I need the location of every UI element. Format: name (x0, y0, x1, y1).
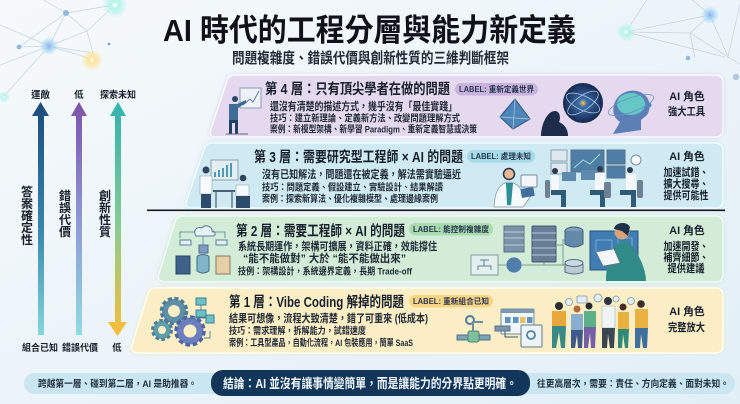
layer 3 description (262, 167, 461, 204)
axis: answer certainty: 組合已知 (22, 342, 58, 353)
icon: brain head (606, 90, 656, 134)
axis: answer certainty (21, 89, 58, 353)
AI role: 擴大搜尋、 (664, 176, 708, 190)
AI role: 提供可能性 (664, 188, 709, 202)
axis: error cost: 錯 (59, 188, 71, 203)
layer 1 heading: 第 1 層：Vibe Coding 解掉的問題 (229, 293, 404, 311)
axis: innovation nature: 低 (112, 342, 122, 353)
icon: team of people (552, 294, 648, 348)
axis: answer certainty: 答 (21, 184, 33, 199)
layer 1 description: 案例：工具型產品，自動化流程，AI 包裝應用，簡單 SaaS (229, 337, 413, 348)
label pill: LABEL: 處理未知 (471, 151, 531, 161)
icon: geometry pyramid (500, 99, 530, 129)
AI role (664, 223, 708, 275)
label pill (409, 295, 493, 308)
axis: answer certainty: 定 (21, 220, 33, 235)
axis: innovation nature: 創 (99, 188, 111, 203)
icon: researcher with tablet (494, 168, 537, 207)
AI role: 完整放大 (668, 320, 705, 334)
layer 4 description: 案例：新模型架構、新學習 Paradigm、重新定義智慧或決策 (270, 124, 478, 134)
layer 4 description (270, 99, 478, 134)
panel: layer 4 (210, 75, 723, 137)
layer 2 description: 技例：架構設計，系統邊界定義，長期 Trade-off (238, 266, 413, 276)
axis: innovation nature: 性 (99, 212, 111, 227)
icon: atom globe (563, 83, 603, 123)
subtitle: 問題複雜度、錯誤代價與創新性質的三維判斷框架 (232, 49, 509, 67)
AI role: 補齊細節、 (664, 250, 708, 264)
icon: engineer with blueprint (590, 223, 646, 281)
AI role: AI 角色 (669, 304, 705, 318)
AI role: AI 角色 (669, 89, 705, 103)
axis: error cost: 價 (59, 224, 71, 239)
label pill (467, 150, 535, 162)
icon: gears and flowchart (152, 298, 214, 345)
axis: innovation nature: 質 (99, 224, 111, 239)
axis: answer certainty: 案 (21, 196, 33, 211)
label pill: LABEL: 能控制複雜度 (413, 224, 489, 234)
icon: two scientists with chart (200, 160, 250, 208)
AI role (668, 304, 705, 334)
AI role (668, 89, 705, 118)
AI role: 加速試錯、 (664, 165, 708, 179)
layer 2 description: “能不能做對” 大於 “能不能做出來” (243, 251, 406, 265)
layer 3 description: 技巧：問題定義、假設建立、實驗設計、結果解讀 (262, 182, 444, 192)
panel: layer 2 (158, 216, 723, 282)
axis: error cost: 代 (59, 213, 71, 227)
axis: error cost: 錯誤代價 (62, 342, 99, 353)
AI role: 強大工具 (668, 104, 705, 118)
axis: innovation nature (99, 89, 136, 353)
bottom note: right: 往更高層次，需要：責任、方向定義、面對未知。 (537, 378, 729, 389)
axis: error cost: 誤 (59, 200, 71, 215)
label pill: LABEL: 重新定義世界 (459, 84, 534, 94)
AI role (664, 149, 709, 202)
divider line (147, 210, 725, 211)
icon: woman looking up (541, 111, 568, 136)
layer 1 description: 技巧：需求理解，拆解能力，試錯速度 (229, 325, 367, 336)
layer 3 heading: 第 3 層：需要研究型工程師 × AI 的問題 (254, 148, 463, 166)
panel: layer 1 (131, 288, 723, 353)
icon: pipe valve (457, 316, 490, 342)
layer 3 description: 沒有已知解法，問題還在被定義，解法需實驗逼近 (262, 167, 461, 181)
bottom note: right (510, 373, 735, 394)
axis: answer certainty: 性 (21, 232, 33, 247)
axis: innovation nature: 探索未知 (100, 89, 136, 100)
axis: error cost: 低 (74, 89, 84, 100)
layer 1 description: 結果可想像，流程大致清楚，錯了可重來 (低成本) (229, 311, 428, 325)
icon: server network (471, 226, 583, 275)
layer 3 description: 案例：探索新算法、優化複雜模型、處理邊緣案例 (262, 193, 438, 204)
title: AI 時代的工程分層與能力新定義 (163, 13, 576, 48)
icon: app windows (495, 309, 542, 347)
panel: layer 3 (186, 143, 723, 208)
layer 2 heading: 第 2 層：需要工程師 × AI 的問題 (236, 222, 405, 240)
label pill (455, 83, 538, 96)
AI role: AI 角色 (669, 223, 705, 237)
label pill: LABEL: 重新組合已知 (413, 296, 489, 306)
AI role: 加速開發、 (664, 239, 708, 253)
icon: cloud and databases (176, 226, 230, 274)
layer 2 description (238, 239, 437, 276)
bottom note: left (24, 373, 224, 394)
conclusion banner: 結論：AI 並沒有讓事情變簡單，而是讓能力的分界點更明確。 (223, 376, 517, 391)
conclusion banner (211, 370, 530, 396)
axis: innovation nature: 新 (99, 200, 111, 215)
axis: answer certainty: 確 (21, 208, 33, 223)
axis: answer certainty: 運敵 (31, 89, 50, 100)
bottom note: left: 跨越第一層、碰到第二層，AI 是助推器。 (38, 378, 197, 389)
layer 4 heading: 第 4 層：只有頂尖學者在做的問題 (265, 80, 450, 98)
AI role: AI 角色 (669, 149, 705, 163)
icon: team at computer wall (545, 150, 643, 207)
icon: person at board (226, 88, 261, 134)
AI role: 提供建議 (668, 261, 705, 275)
label pill (409, 223, 493, 236)
layer 4 description: 還沒有清楚的描述方式，幾乎沒有「最佳實踐」 (270, 99, 457, 113)
axis: error cost (59, 89, 99, 353)
layer 4 description: 技巧：建立新理論、定義新方法、改變問題理解方式 (270, 112, 461, 124)
layer 2 description: 系統長期運作，架構可擴展，資料正確，效能撐住 (238, 239, 437, 253)
layer 1 description (229, 311, 428, 348)
